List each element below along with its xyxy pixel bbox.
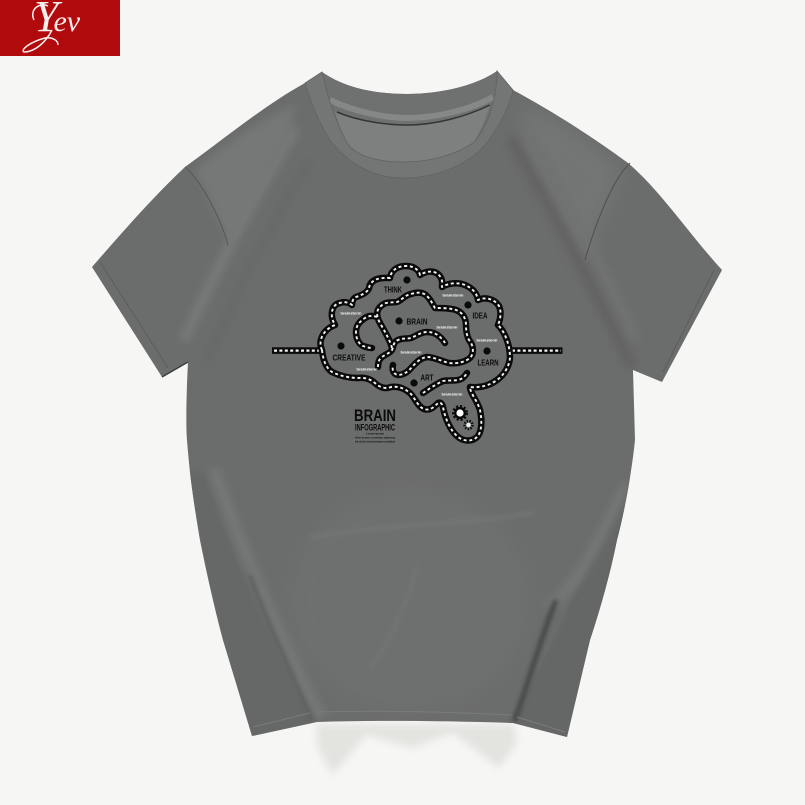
icon: large gear [454,406,466,420]
brain road outlines [321,266,510,441]
hem shadow [316,724,516,775]
infographic title block [354,407,396,444]
node labels: IDEA [472,310,488,320]
node labels: BRAIN [406,316,428,326]
neck tape [330,97,493,118]
inside front [335,105,490,162]
brain infographic [272,266,562,444]
infographic title block: dolor sit amet, consectetur adipiscing [355,436,395,440]
brainstorm tags [340,293,498,396]
right diagonal fold [512,141,587,274]
shirt body [92,71,722,737]
sleeve seam left [185,167,228,245]
infographic title block: Lorem ipsum [366,432,384,436]
brainstorm tags: brainstorm [356,367,378,371]
right road line [509,347,562,354]
left body panel shade [186,470,313,740]
node labels [332,284,498,382]
brainstorm tags: brainstorm [442,293,464,297]
left road line [272,347,323,354]
right body panel shade [516,478,630,737]
sleeve hem stitch left [100,262,168,368]
vertical crease [370,565,417,670]
collar interior [322,71,498,162]
icon: small gear [464,421,472,429]
node labels: ART [420,372,434,382]
brainstorm tags: brainstorm [400,350,422,354]
brainstorm tags: brainstorm [442,392,463,396]
bottom hem stitch [253,711,565,732]
shoulder and chest shading [200,112,290,230]
brainstorm tags: brainstorm [340,311,362,315]
brainstorm tags: brainstorm [436,325,458,329]
horizontal crease [310,513,533,537]
sleeve hem stitch right [663,270,714,372]
node labels: CREATIVE [332,352,366,362]
logo badge [0,0,120,56]
brainstorm tags: brainstorm [476,338,498,342]
right bottom fold [556,484,628,599]
left diagonal fold [184,128,296,340]
t-shirt [92,71,722,740]
sleeve opening edge [162,362,188,377]
infographic title block: elit sed do eiusmod tempor incididunt [355,440,395,444]
neck tape shadow [337,105,490,125]
infographic title block: BRAIN [354,407,396,425]
node labels: THINK [384,284,403,294]
collar ribbing [305,71,513,178]
left bottom fold [214,469,322,718]
logo swashes [23,5,58,52]
sleeve seam right [585,163,630,260]
node labels: LEARN [478,358,498,368]
infographic title block: INFOGRAPHIC [355,422,395,433]
location dots [337,276,491,387]
